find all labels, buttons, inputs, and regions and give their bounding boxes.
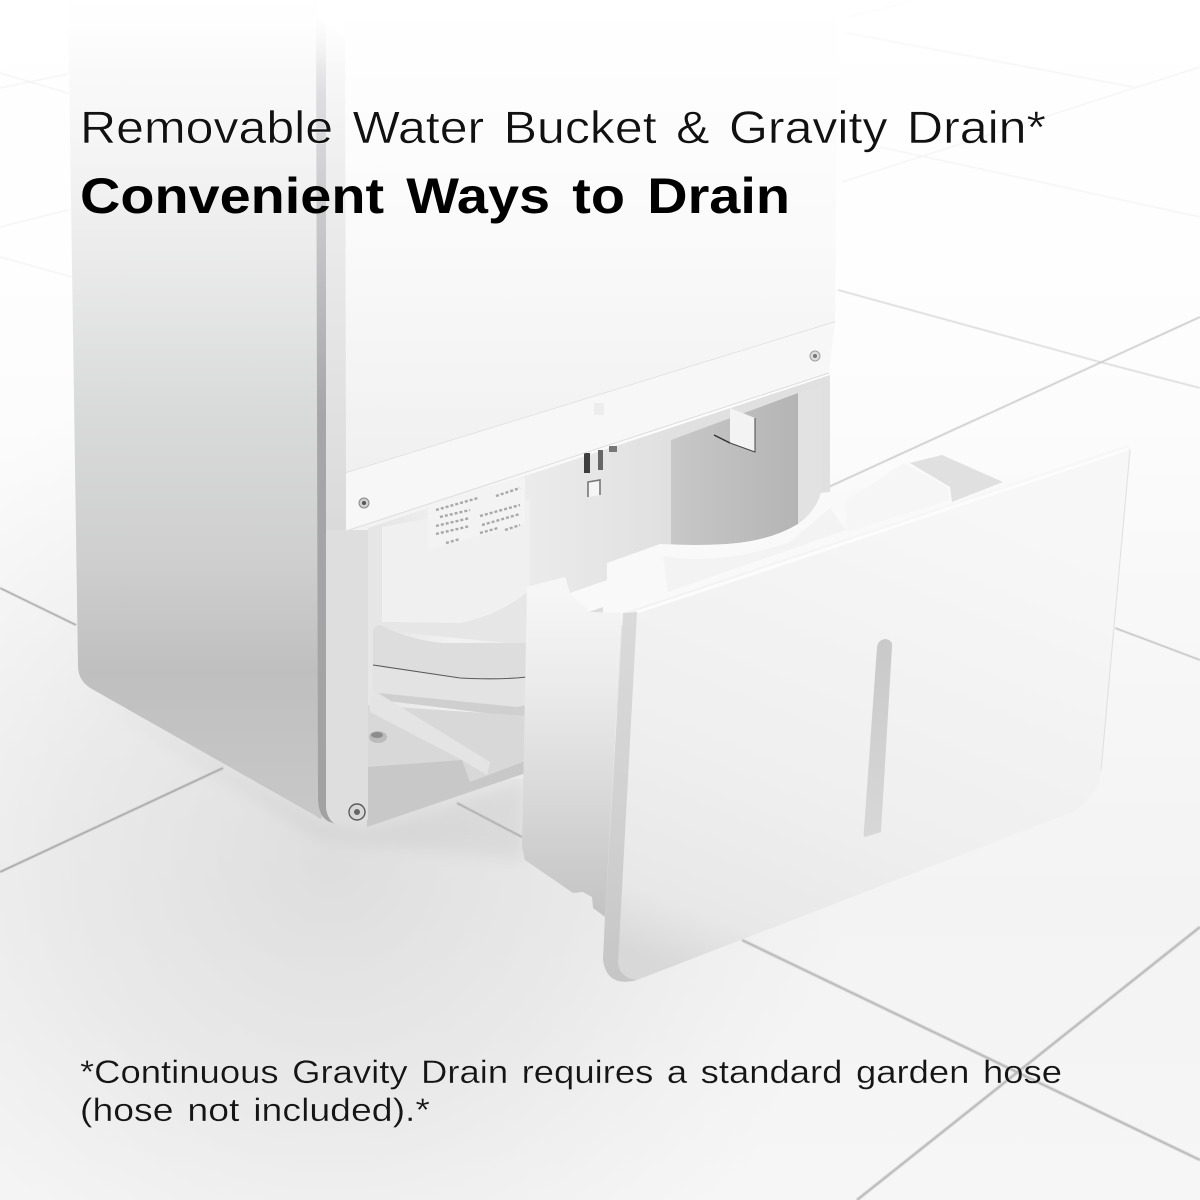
heading: title: Convenient Ways to Drain: [80, 168, 790, 224]
base plate: [367, 705, 530, 827]
soft contact shadow: [90, 692, 525, 860]
front panel: [603, 446, 1131, 982]
lip: [378, 693, 530, 717]
slots: [584, 446, 617, 497]
recess side column: [798, 388, 821, 524]
footnote: [80, 1054, 1062, 1128]
screw top right: [810, 351, 820, 361]
screw bottom: [349, 804, 365, 820]
catch tab: [714, 408, 755, 452]
cavity back wall: [368, 375, 830, 780]
upper band: [373, 625, 530, 678]
tub recess: [663, 508, 846, 592]
footnote: *Continuous Gravity Drain requires a standard garden hose: [80, 1054, 1062, 1090]
heading: subtitle: Removable Water Bucket & Gravity Drain*: [80, 102, 1046, 153]
tub small gray opening: [580, 607, 603, 623]
upper front panel: [345, 0, 838, 473]
tub block: [845, 463, 950, 532]
seam: [373, 665, 527, 679]
sight window slit: [864, 639, 892, 837]
tub rim and interior: [527, 455, 1040, 630]
lower front strip: [346, 322, 835, 531]
front frame post: [326, 530, 368, 824]
lower band: [373, 665, 530, 716]
edge channel: [316, 15, 336, 824]
bucket side: [522, 577, 622, 917]
footnote: (hose not included).*: [80, 1092, 430, 1128]
housing area below cylinder: [373, 590, 530, 645]
front frame column: [326, 25, 368, 824]
screw base: [369, 731, 387, 743]
gray recess: [671, 393, 798, 545]
motor housing: [367, 590, 530, 827]
panel top edge: [637, 449, 1128, 612]
cavity interior: [367, 375, 830, 827]
top fade: [0, 0, 1200, 70]
cylinder curve: [382, 500, 530, 623]
panel bevel: [603, 612, 637, 982]
base front: [367, 760, 528, 827]
tub gray corner: [910, 455, 1003, 502]
screw top left: [359, 498, 369, 508]
side panel: [68, 0, 322, 819]
rib: [370, 693, 490, 775]
rating label: [428, 477, 525, 550]
dehumidifier body: [68, 0, 838, 860]
removable water bucket: [522, 446, 1131, 982]
